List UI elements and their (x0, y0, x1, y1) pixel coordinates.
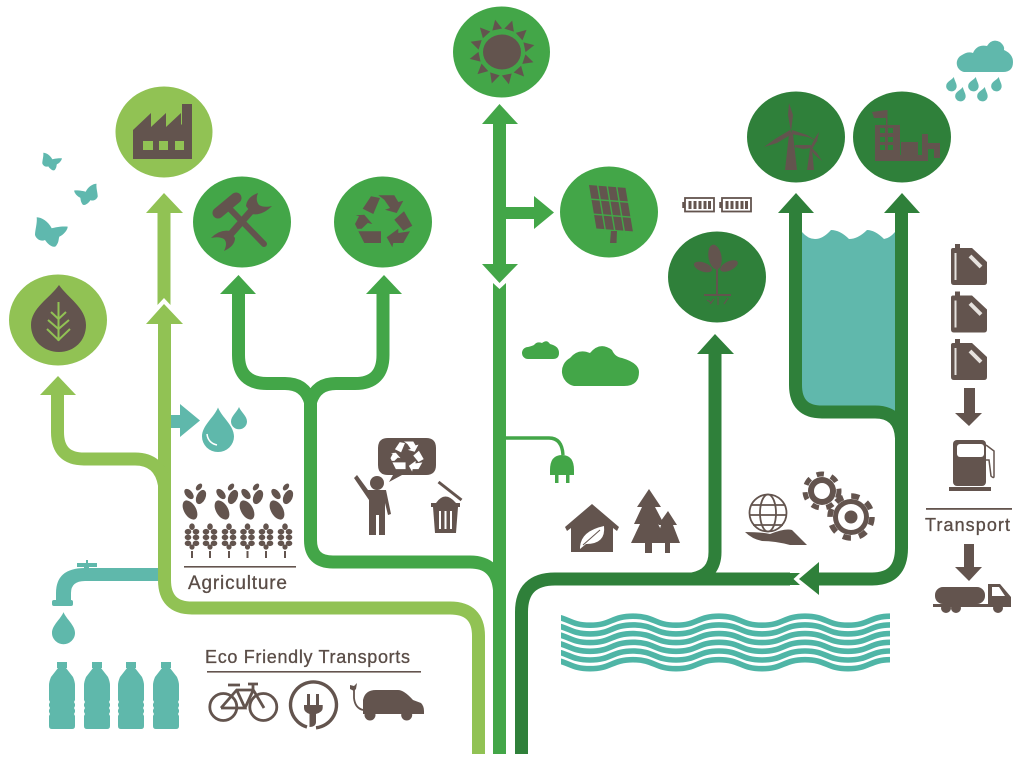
icon: electric car (350, 683, 424, 720)
icon: tanker truck (933, 584, 1011, 613)
icon: globe in hand (745, 494, 807, 545)
pipe: main dark green (522, 579, 790, 754)
transport label block (925, 508, 1012, 535)
icon: speech bubble with recycle (378, 438, 436, 482)
icon: gears (805, 474, 872, 538)
icon: arrow to water (171, 404, 200, 437)
icon: water drops (202, 407, 247, 452)
circle: solar panel (560, 166, 658, 258)
pipe: branch to plant (692, 352, 715, 579)
icon: fuel pump (949, 440, 994, 491)
medium green pipe system (238, 292, 500, 590)
circle: recycle (334, 176, 432, 268)
dark green pipe system (522, 211, 902, 754)
icon: batteries (684, 198, 751, 212)
arrow head: flow left (799, 562, 819, 595)
label: eco friendly transports: Eco Friendly Transports (205, 647, 410, 667)
light green pipe system (58, 322, 478, 754)
arrow head: to tools (220, 275, 256, 294)
icon: power plug (506, 438, 574, 483)
pipe: tools fork (238, 292, 310, 402)
circle: leaf drop (9, 274, 107, 366)
icon: wheat row (185, 523, 292, 558)
arrow: cans to pump (955, 388, 982, 426)
reservoir water (802, 230, 895, 412)
icon: trees (631, 489, 680, 553)
icon: water tap (52, 560, 158, 644)
icon: rain cloud (945, 41, 1013, 103)
pipe end notch (785, 573, 800, 585)
pipe: central trunk (493, 283, 506, 754)
pipe: main light green (164, 322, 478, 754)
circle: wind turbines (747, 92, 845, 182)
icon: green house with leaf (565, 504, 619, 552)
circle: tools (193, 176, 291, 268)
arrow: transport to truck (955, 544, 982, 581)
icon: plug in circle (290, 682, 336, 728)
circle: factory (116, 86, 212, 178)
icon: water bottles (49, 662, 179, 729)
arrow head: mid light green (146, 304, 183, 324)
pipe: branch to leaf circle (58, 393, 164, 485)
agriculture block (180, 482, 296, 594)
icon: fuel cans (951, 244, 987, 380)
eco friendly transports block (205, 647, 424, 728)
pipe: recycle fork (310, 292, 383, 402)
pipe: recycling branch (310, 398, 500, 590)
icon: person (354, 475, 391, 535)
circle: sun (453, 6, 550, 98)
pipe: right riser (817, 211, 902, 579)
arrow head: to building (884, 193, 920, 213)
arrow head: to plant (697, 334, 734, 354)
circle: plant (668, 232, 766, 322)
icon: trash bin (431, 482, 462, 533)
clouds green (522, 341, 639, 386)
label: transport: Transport (925, 515, 1010, 535)
river waves (547, 616, 891, 669)
arrow: central double headed with solar branch (482, 104, 554, 283)
icon: sprouts (180, 482, 295, 522)
pipe: left riser (796, 211, 902, 438)
label: agriculture: Agriculture (188, 573, 287, 594)
recycling person block (354, 438, 462, 535)
arrow head: to leaf circle (40, 376, 76, 395)
arrow head: to wind (778, 193, 814, 213)
arrow head: to recycle (366, 275, 402, 294)
butterflies (35, 153, 98, 247)
arrow: to factory (146, 193, 183, 305)
icon: bicycle (210, 684, 277, 720)
circle: green building (853, 92, 951, 182)
